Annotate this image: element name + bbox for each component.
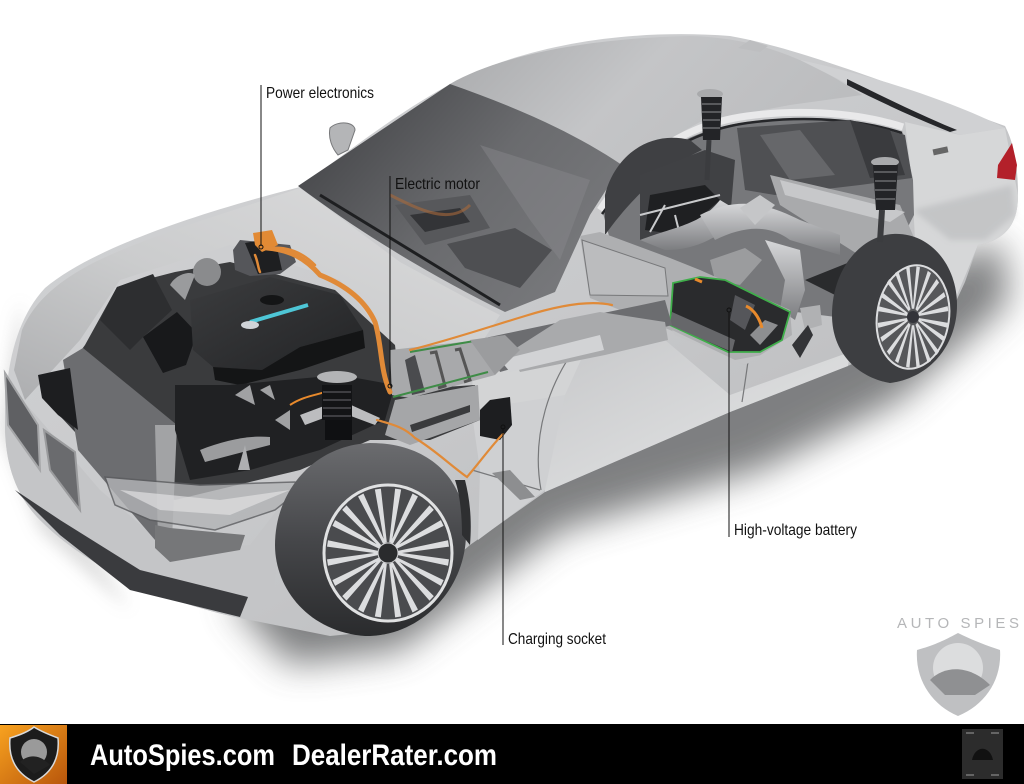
- battery tray: [580, 232, 792, 365]
- left grille: [5, 373, 40, 470]
- front fender panel: [470, 395, 565, 540]
- strut tower: [193, 258, 221, 286]
- front strut spring: [317, 371, 357, 440]
- watermark: Auto Spies: [897, 615, 1019, 716]
- cover roundel: [241, 321, 259, 329]
- interior seats through glass: [320, 145, 590, 305]
- door panel: [542, 335, 850, 492]
- shark fin: [738, 40, 768, 52]
- rear muffler: [770, 175, 915, 262]
- charging socket: [480, 397, 512, 440]
- lower front module: [155, 525, 245, 562]
- callout: Charging socket: Charging socket: [508, 631, 606, 648]
- underbody pan: [385, 385, 480, 445]
- rear spring right: [871, 157, 899, 242]
- orange high-voltage cables: [255, 248, 612, 477]
- windshield: [298, 84, 622, 312]
- headlight: [105, 477, 300, 530]
- rear deck: [800, 60, 1005, 135]
- right grille: [44, 430, 80, 510]
- ground shadow: [230, 240, 1010, 665]
- engine cover: [190, 277, 363, 370]
- rear wheel: [832, 234, 957, 383]
- exhaust and driveshaft: [485, 300, 672, 372]
- radiator: [63, 348, 177, 540]
- rear left hub: [640, 150, 735, 240]
- radiator side dark module: [38, 368, 78, 430]
- cover blue stripe: [250, 305, 308, 322]
- side air vent: [492, 470, 535, 500]
- front wheel: [275, 443, 466, 636]
- callout: Electric motor: [388, 176, 481, 388]
- mirror: [329, 123, 355, 155]
- callout: Power electronics: [259, 85, 374, 249]
- car body shell: [5, 34, 1018, 636]
- callout: Power electronics: Power electronics: [266, 85, 374, 102]
- intake and airbox: [100, 274, 172, 350]
- footer small thumbnail: [962, 729, 1003, 779]
- callout: High-voltage battery: High-voltage battery: [734, 522, 857, 539]
- callout: Charging socket: [501, 425, 606, 648]
- engine lower block: [175, 375, 395, 480]
- left soft shadow: [0, 300, 130, 610]
- rear subframe: [640, 195, 850, 358]
- rear spring left: [697, 89, 723, 180]
- footer bar: [0, 724, 1024, 784]
- power electronics unit: [233, 230, 296, 276]
- rear left wheel: [605, 138, 702, 235]
- callout: Electric motor: Electric motor: [395, 176, 481, 193]
- tail light: [997, 143, 1017, 180]
- lower air intake: [15, 490, 248, 617]
- watermark: Auto Spies: AUTO SPIES: [897, 615, 1019, 632]
- spoiler strip: [847, 79, 957, 132]
- footer site names: AutoSpies.com: [90, 739, 275, 772]
- callout: High-voltage battery: [727, 308, 857, 539]
- high-voltage battery: [670, 277, 790, 365]
- car illustration: [5, 34, 1018, 636]
- rear side window cabin: [603, 118, 914, 320]
- rear quarter panel: [905, 122, 1018, 300]
- model badge: [933, 146, 948, 155]
- footer bar: DealerRater.com: [292, 739, 497, 772]
- front cutaway engine bay: [45, 262, 480, 500]
- transmission: [390, 335, 520, 398]
- wheel arch edge: [455, 480, 471, 545]
- footer logo: [0, 725, 67, 784]
- roof: [450, 36, 862, 165]
- hood: [14, 188, 500, 400]
- front bumper: [5, 380, 285, 620]
- door cut lines: [472, 296, 757, 490]
